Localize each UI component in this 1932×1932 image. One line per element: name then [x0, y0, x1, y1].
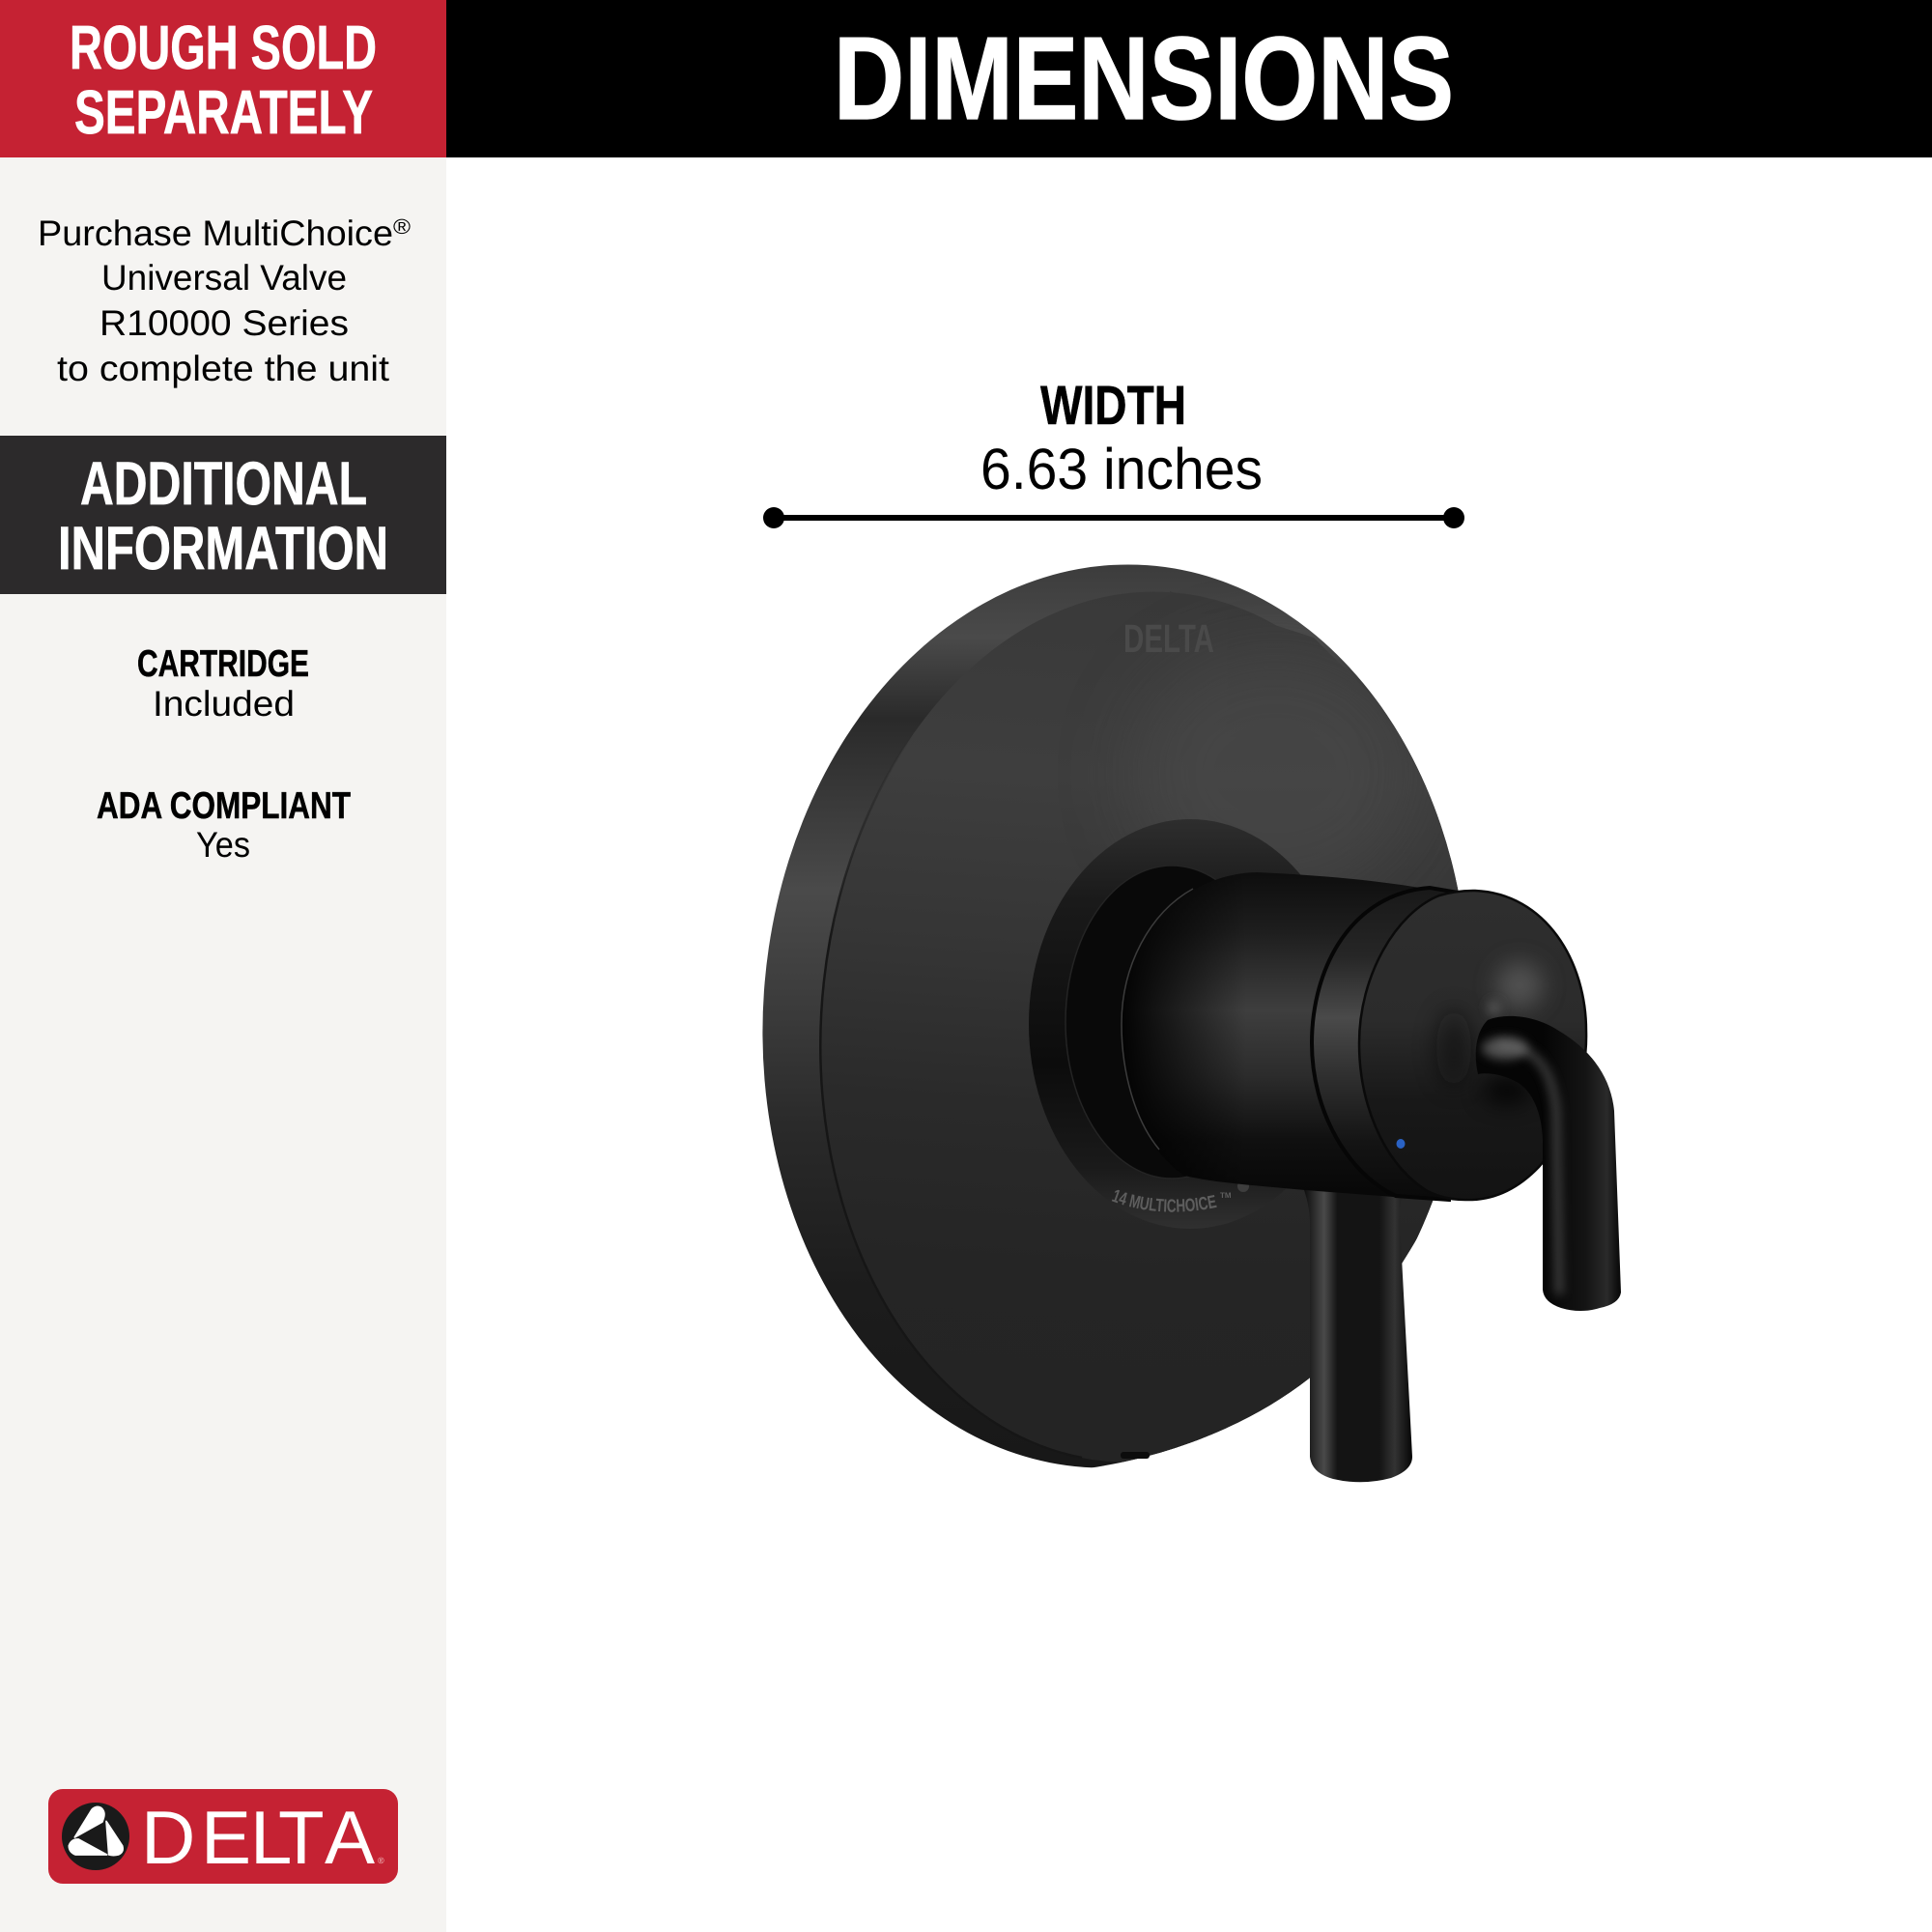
product image: shower valve trim	[762, 564, 1621, 1482]
banner text line 2: SEPARATELY	[74, 77, 373, 147]
spec: ADA compliant	[97, 785, 351, 865]
title: DIMENSIONS	[834, 13, 1454, 144]
trim plate	[762, 564, 1459, 1468]
banner text line 1: ROUGH SOLD	[70, 13, 377, 82]
spec: cartridge: CARTRIDGE	[137, 643, 309, 685]
heading: additional information: INFORMATION	[58, 515, 388, 582]
center ring: TM	[1220, 1191, 1232, 1200]
text block: purchase note: R10000 Series	[99, 303, 349, 343]
heading: additional information	[0, 436, 446, 594]
logo: Delta badge	[48, 1789, 398, 1884]
rear lever handle	[1476, 1016, 1621, 1311]
text block: purchase note: to complete the unit	[57, 349, 390, 388]
spec: cartridge: Included	[153, 684, 295, 724]
front lever handle	[1302, 1184, 1412, 1482]
indicator dot	[1397, 1139, 1405, 1149]
text block: purchase note	[38, 213, 411, 388]
spec: cartridge	[137, 643, 309, 724]
heading: width: WIDTH	[1040, 375, 1186, 437]
dimension line	[763, 507, 1464, 528]
panel: left sidebar	[0, 157, 446, 1932]
text block: purchase note: Purchase MultiChoice	[38, 213, 393, 253]
logo: Delta badge: DELTA	[141, 1795, 375, 1880]
text block: purchase note: Universal Valve	[101, 258, 347, 298]
heading: additional information: ADDITIONAL	[80, 450, 367, 518]
spec: ADA compliant: Yes	[196, 825, 250, 865]
panel: red banner	[0, 0, 446, 157]
trim plate: DELTA	[1123, 616, 1214, 661]
value: width measurement: 6.63 inches	[980, 437, 1263, 501]
knob face	[1359, 891, 1586, 1200]
knob collar	[1312, 888, 1459, 1200]
text block: purchase note: ®	[393, 214, 411, 239]
cylinder body	[1122, 872, 1432, 1198]
center ring	[1029, 819, 1300, 1229]
panel: black title bar	[446, 0, 1932, 157]
logo: Delta badge: ®	[378, 1856, 384, 1865]
spec: ADA compliant: ADA COMPLIANT	[97, 785, 351, 827]
center ring: 14 MULTICHOICE	[1111, 1190, 1217, 1212]
